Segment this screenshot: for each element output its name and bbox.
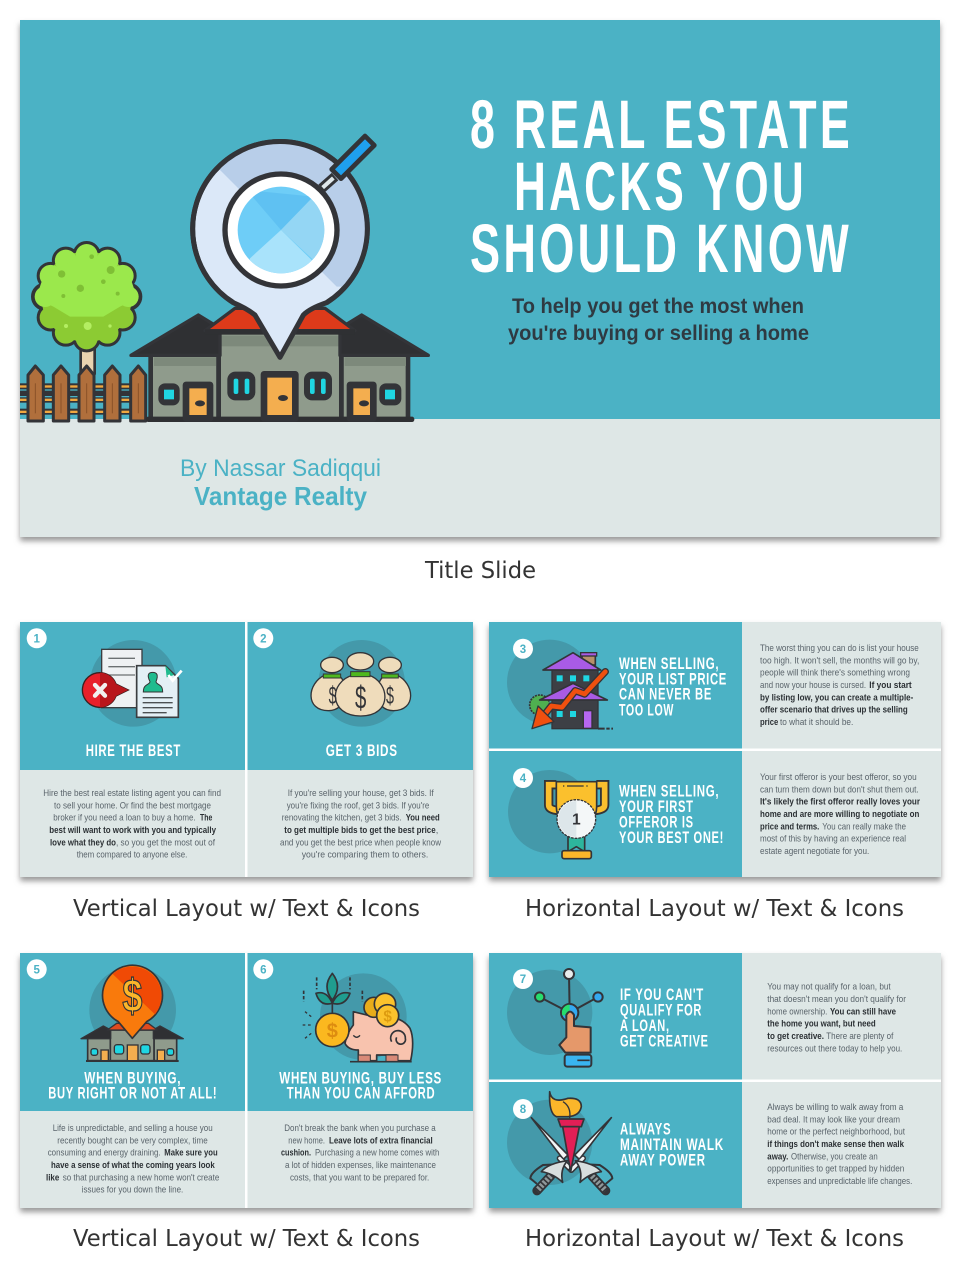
text block: hack 5 [46,1123,219,1195]
heading: hire the best: HIRE THE BEST [86,742,181,760]
text block: hack 6: a lot of hidden expenses, like maintenance [285,1160,436,1170]
text block: hack 3: by listing low, you can create a multiple- [760,692,913,702]
badge 2: 2 [260,634,267,646]
text block: hack 5: like [46,1172,59,1182]
text block: hack 3 [760,643,919,727]
hack 8 [507,1092,912,1191]
text block: hack 8: home or the perfect neighborhood, but [767,1127,905,1137]
subtitle: To help you get the most when [512,295,804,318]
text block: hack 4: estate agent negotiate for you. [760,846,869,856]
text block: hack 1: to sell your home. Or find the best mortgage [54,800,211,810]
text block: hack 4: It's likely the first offeror really loves your [760,797,920,807]
panel: title slide [20,20,940,541]
text block: hack 1: love what they do [50,837,116,847]
heading: get creative [620,986,709,1051]
heading: first offeror [619,783,724,847]
text block: hack 1: best will want to work with you and typically [49,825,217,835]
panel: horizontal layout, hacks 3 and 4 [489,622,941,881]
text block: hack 7: There are plenty of [826,1031,894,1041]
subtitle: you're buying or selling a home [508,322,809,345]
icon: money bags: $ [329,682,337,710]
text block: hack 1: Hire the best real estate listing agent you can find [43,788,221,798]
text block: hack 5: consuming and energy draining. [48,1148,161,1158]
heading: first offeror: YOUR BEST ONE! [619,829,724,847]
badge 5: 5 [33,964,40,976]
text block: hack 6: Purchasing a new home comes with [315,1148,439,1158]
badge 1 [27,628,47,648]
text block: hack 3: price [760,717,778,727]
icon: resumes with reject mark [82,640,182,727]
heading: list price: WHEN SELLING, [619,655,719,673]
heading: first offeror: WHEN SELLING, [619,783,719,801]
badge 8 [513,1099,533,1119]
heading: walk away power [620,1120,724,1169]
text block: hack 3: offer scenario that drives up the selling [760,705,908,715]
text block: hack 5: issues for you down the line. [82,1185,183,1195]
text block: hack 8: bad deal. It may look like your dream [767,1114,900,1124]
text block: hack 8: expenses and unpredictable life changes. [767,1176,912,1186]
heading: buy less [279,1069,442,1102]
badge 6: 6 [260,964,267,976]
heading: walk away power: ALWAYS [620,1120,671,1138]
hack 3 [507,639,919,729]
heading: get 3 bids: GET 3 BIDS [326,742,398,760]
text block: hack 3: people will think there's something wrong [760,668,910,678]
caption: vertical layout: Vertical Layout w/ Text & Icons [73,896,420,922]
panel: vertical layout, hacks 5 and 6 [20,953,473,1212]
heading: get creative: IF YOU CAN'T [620,986,704,1004]
icon: tree [33,243,140,373]
text block: hack 7: that doesn't mean you don't qualify for [767,994,906,1004]
text block: hack 6 [281,1123,439,1182]
icon: torch and crossed swords [507,1092,612,1191]
text block: hack 2: you're fixing the roof, get 3 bids. If you're [287,800,429,810]
caption: title slide: Title Slide [424,558,536,584]
icon: piggy bank, coins and plant: $ [327,1020,338,1042]
heading: list price [619,655,727,719]
icon: house with price pin [81,965,183,1062]
heading: buy right [48,1069,217,1102]
heading: buy less: WHEN BUYING, BUY LESS [279,1069,442,1087]
author and company [180,455,381,511]
caption: vertical layout, second row: Vertical Layout w/ Text & Icons [73,1226,420,1252]
heading: walk away power: AWAY POWER [620,1151,706,1169]
badge 6 [253,959,273,979]
text block: hack 2 [280,788,441,860]
text block: hack 7: the home you want, but need [767,1019,876,1029]
text block: hack 3: If you start [869,680,912,690]
text block: hack 7: to get creative. [767,1031,824,1041]
badge 7 [513,969,533,989]
text block: hack 3: too high. It won't sell, the months will go by, [760,655,919,665]
text block: hack 8: Otherwise, you create an [791,1151,878,1161]
heading: get creative: A LOAN, [620,1017,670,1035]
text block: hack 5: have a sense of what the coming years look [51,1160,215,1170]
caption: horizontal layout, second row: Horizontal Layout w/ Text & Icons [525,1226,904,1252]
text block: hack 8: opportunities to get trapped by hidden [767,1164,904,1174]
icon: money bags: $ [386,682,394,710]
heading: list price: YOUR LIST PRICE [619,670,727,688]
text block: hack 7: resources out there today to help you. [767,1044,902,1054]
heading: walk away power: MAINTAIN WALK [620,1136,724,1154]
text block: hack 1: The [200,813,212,823]
heading: get creative: GET CREATIVE [620,1033,709,1051]
text block: hack 1: , so you get the most out of [116,837,215,847]
badge 7: 7 [520,974,526,986]
text block: hack 3: to what it should be. [780,717,853,727]
heading: buy right: WHEN BUYING, [84,1069,181,1087]
text block: hack 1: them compared to anyone else. [77,850,187,860]
heading: list price: TOO LOW [619,701,674,719]
text block: hack 7: home ownership. [767,1006,827,1016]
badge 1: 1 [33,634,40,646]
text block: hack 2: you're comparing them to others. [302,850,428,860]
text block: hack 8: if things don't make sense then walk [767,1139,905,1149]
icon: house with price pin: $ [122,969,142,1021]
caption: horizontal layout: Horizontal Layout w/ Text & Icons [525,896,904,922]
text block: hack 4: price and terms. [760,821,819,831]
hack 6 [253,959,442,1182]
hack 2 [253,628,441,860]
icon: location pin with magnifier [193,136,374,357]
hack 4 [508,768,920,859]
badge 4 [513,768,533,788]
hack 5 [27,959,219,1195]
icon: trophy with medal: 1 [572,812,581,829]
text block: hack 4 [760,772,920,856]
heading: buy less: THAN YOU CAN AFFORD [287,1084,435,1102]
text block: hack 4: can turn them down but don't shut them out. [760,784,919,794]
text block: hack 4: Your first offeror is your best offeror, so you [760,772,917,782]
text block: hack 3: The worst thing you can do is list your house [760,643,919,653]
text block: hack 8 [767,1102,912,1186]
badge 3: 3 [520,644,526,656]
text block: hack 6: cushion. [281,1148,311,1158]
text block: hack 7 [767,982,906,1054]
heading: get creative: QUALIFY FOR [620,1002,702,1020]
text block: hack 8: away. [767,1151,788,1161]
text block: hack 2: renovating the kitchen, get 3 bids. [282,813,402,823]
hack 7 [507,969,906,1067]
title [470,86,853,287]
text block: hack 2: If you're selling your house, get 3 bids. If [288,788,434,798]
text block: hack 6: Don't break the bank when you purchase a [284,1123,436,1133]
text block: hack 6: costs, that you want to be prepared for. [290,1172,429,1182]
text block: hack 2: to get multiple bids to get the best price [284,825,436,835]
text block: hack 4: home and are more willing to negotiate on [760,809,920,819]
text block: hack 2: and you get the best price when people know [280,837,441,847]
text block: hack 2: , [436,825,438,835]
text block: hack 4: You can really make the [822,821,906,831]
text block: hack 4: most of this by having an experience real [760,834,906,844]
badge 4: 4 [520,773,527,785]
illustration: house, pin, tree and fence [20,136,428,422]
text block: hack 7: You may not qualify for a loan, but [767,982,891,992]
icon: fence [20,366,146,421]
title: HACKS YOU [514,148,807,225]
panel: vertical layout, hacks 1 and 2 [20,622,473,881]
hack 1 [27,628,221,860]
heading: first offeror: YOUR FIRST [619,798,694,816]
author and company: Vantage Realty [194,481,367,511]
badge 2 [253,628,273,648]
text block: hack 7: You can still have [830,1006,896,1016]
text block: hack 6: new home. [288,1135,325,1145]
text block: hack 1 [43,788,221,860]
text block: hack 5: Life is unpredictable, and selling a house you [53,1123,213,1133]
text block: hack 8: Always be willing to walk away from a [767,1102,904,1112]
text block: hack 3: and now your house is cursed. [760,680,866,690]
icon: piggy bank, coins and plant [303,973,413,1062]
text block: hack 5: so that purchasing a new home won't create [63,1172,219,1182]
icon: money bags: $ [355,678,366,715]
author and company: By Nassar Sadiqqui [180,455,381,482]
badge 3 [513,639,533,659]
subtitle [508,295,809,345]
icon: piggy bank, coins and plant: $ [383,1009,392,1026]
icon: house [131,308,428,422]
text block: hack 2: You need [406,813,440,823]
icon: trophy with medal [508,770,605,859]
text block: hack 6: Leave lots of extra financial [329,1135,433,1145]
heading: list price: CAN NEVER BE [619,686,712,704]
heading: buy right: BUY RIGHT OR NOT AT ALL! [48,1084,217,1102]
icon: hand touching network [507,969,603,1067]
text block: hack 1: broker if you need a loan to buy a home. [53,813,196,823]
badge 5 [27,959,47,979]
heading: first offeror: OFFEROR IS [619,813,694,831]
panel: horizontal layout, hacks 7 and 8 [489,953,941,1212]
icon: money bags [311,640,411,727]
badge 8: 8 [520,1104,527,1116]
text block: hack 5: recently bought can be very complex, time [57,1135,208,1145]
icon: house with falling price arrow [507,640,613,729]
text block: hack 5: Make sure you [164,1148,218,1158]
